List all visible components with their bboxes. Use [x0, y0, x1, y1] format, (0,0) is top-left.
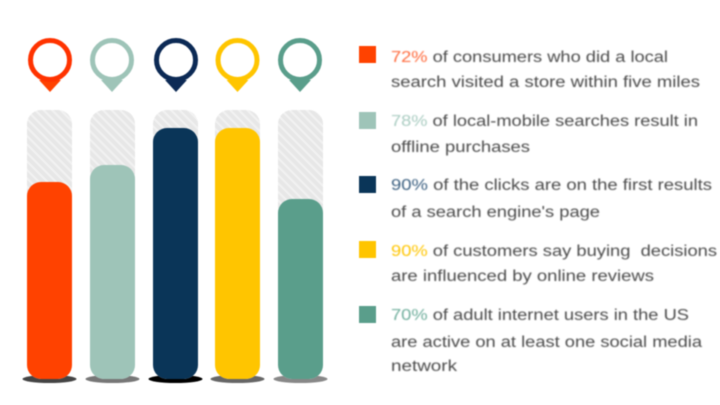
icon: navy pin — [156, 40, 196, 92]
bar: 78% light green — [86, 110, 140, 383]
icon: yellow pin — [218, 40, 257, 92]
icon: light green pin — [92, 40, 132, 92]
legend item: 90% clicks — [359, 176, 712, 221]
bar chart — [22, 110, 328, 383]
bar: 90% yellow — [210, 110, 264, 383]
legend item: 72%: 72% of consumers who did a local — [391, 49, 668, 66]
icon: red pin — [30, 40, 70, 92]
legend item: 90% clicks: of a search engine's page — [391, 204, 600, 221]
legend item: 90% reviews — [359, 241, 717, 285]
panel: location pins — [30, 40, 320, 92]
legend item: 72%: search visited a store within five miles — [391, 74, 700, 91]
panel: legend — [359, 46, 717, 375]
icon: green pin — [280, 40, 320, 92]
legend item: 70% — [359, 306, 702, 375]
legend item: 70%: network — [391, 358, 457, 375]
legend item: 90% reviews: 90% of customers say buying decisions — [391, 243, 717, 260]
legend item: 70%: are active on at least one social media — [391, 334, 702, 351]
legend item: 78% — [359, 112, 698, 156]
legend item: 78%: 78% of local-mobile searches result in — [391, 113, 698, 130]
legend item: 90% clicks: 90% of the clicks are on the first results — [391, 177, 712, 194]
bar: 90% navy — [148, 110, 202, 383]
bar: 72% red — [22, 110, 76, 383]
legend item: 70%: 70% of adult internet users in the US — [391, 307, 689, 324]
legend item: 78%: offline purchases — [391, 139, 530, 156]
legend item: 90% reviews: are influenced by online reviews — [391, 268, 654, 285]
legend item: 72% — [359, 46, 700, 91]
bar: 70% green — [274, 110, 328, 383]
